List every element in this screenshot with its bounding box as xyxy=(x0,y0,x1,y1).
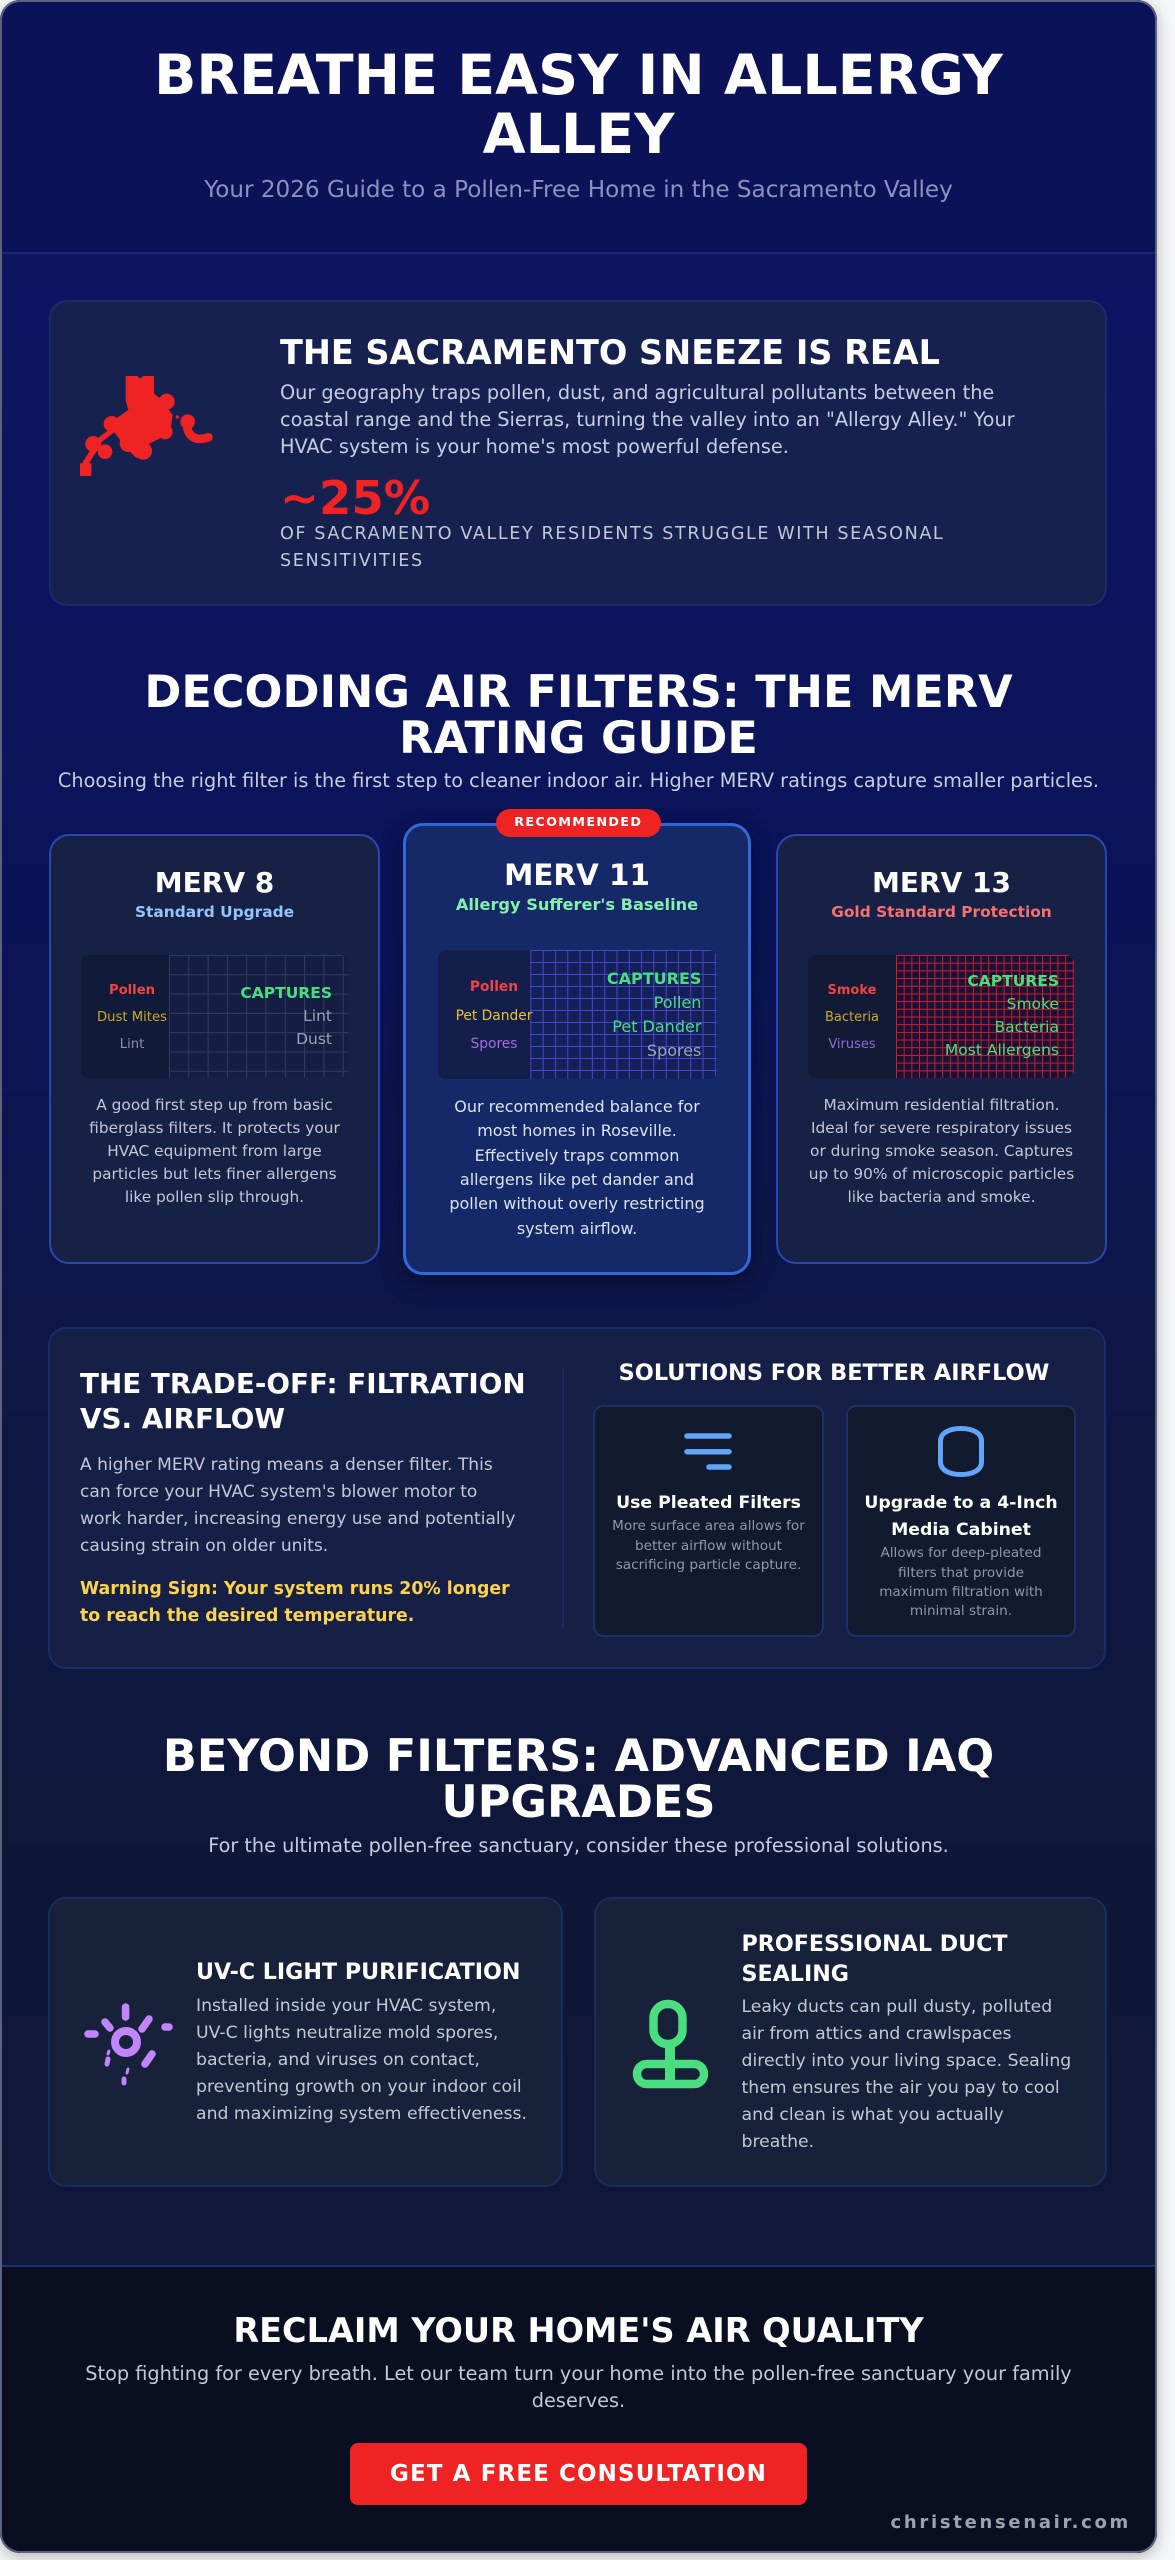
subtitle: Your 2026 Guide to a Pollen-Free Home in the Sacramento Valley xyxy=(204,177,953,203)
solution: media cabinet xyxy=(846,1405,1076,1637)
MERV 11 description xyxy=(449,1097,705,1238)
MERV 11 description: pollen without overly restricting xyxy=(449,1194,705,1213)
pleated text: better airflow without xyxy=(635,1538,782,1554)
particles list: Lint xyxy=(120,1037,144,1052)
panel: UV-C xyxy=(48,1897,563,2187)
title: ALLEY xyxy=(483,102,674,166)
warning text: Warning Sign: Your system runs 20% longer xyxy=(80,1578,510,1598)
MERV 13 tagline: Gold Standard Protection xyxy=(831,903,1052,921)
trade-off body: causing strain on older units. xyxy=(80,1536,328,1556)
cabinet text: filters that provide xyxy=(898,1565,1024,1581)
footer text: deserves. xyxy=(532,2388,625,2412)
pleated text: sacrificing particle capture. xyxy=(616,1557,801,1573)
heading: advanced IAQ: BEYOND FILTERS: ADVANCED IAQ xyxy=(163,1730,994,1782)
stat: ~25% xyxy=(280,471,430,525)
body text: Our geography traps pollen, dust, and agricultural pollutants between the xyxy=(280,381,994,404)
MERV 13 description: like bacteria and smoke. xyxy=(848,1188,1036,1206)
particles list: Viruses xyxy=(828,1037,876,1052)
particles list: Smoke xyxy=(828,983,876,998)
particles list: Dust Mites xyxy=(97,1010,167,1025)
MERV 11 description: system airflow. xyxy=(517,1219,637,1238)
call to action button: GET A FREE CONSULTATION xyxy=(390,2461,767,2487)
body text xyxy=(280,381,1015,458)
panel: duct sealing xyxy=(594,1897,1106,2187)
stat caption xyxy=(280,524,944,570)
captures list: Smoke xyxy=(1007,995,1059,1013)
title: BREATHE EASY IN ALLERGY xyxy=(154,43,1003,108)
particles list: Spores xyxy=(470,1036,518,1052)
panel: Sacramento sneeze xyxy=(49,300,1107,606)
solution: pleated filters xyxy=(593,1405,824,1637)
MERV 13 description xyxy=(809,1096,1074,1206)
panel: MERV 11 recommended xyxy=(403,823,751,1275)
footer xyxy=(0,2265,1157,2553)
MERV 13 description: Ideal for severe respiratory issues xyxy=(811,1118,1072,1136)
captures list: Bacteria xyxy=(995,1018,1059,1036)
MERV 8 description: HVAC equipment from large xyxy=(107,1142,322,1160)
body text: HVAC system is your home's most powerful defense. xyxy=(280,435,789,458)
MERV 13 description: up to 90% of microscopic particles xyxy=(809,1164,1074,1182)
solutions heading: SOLUTIONS FOR BETTER AIRFLOW xyxy=(619,1360,1049,1386)
MERV 8 title: MERV 8 xyxy=(155,866,274,899)
stat caption: OF SACRAMENTO VALLEY RESIDENTS STRUGGLE WITH SEASONAL xyxy=(280,524,944,544)
title xyxy=(154,43,1004,166)
heading: advanced IAQ xyxy=(163,1730,994,1828)
footer text: Stop fighting for every breath. Let our team turn your home into the pollen-free sanctuary your family xyxy=(85,2362,1072,2384)
subheading: MERV guide: Choosing the right filter is the first step to cleaner indoor air. Higher MERV ratings capture smaller particles. xyxy=(58,769,1099,792)
pleated text xyxy=(612,1518,805,1573)
duct text: air from attics and crawlspaces xyxy=(742,2024,1012,2044)
cabinet title: Upgrade to a 4-Inch xyxy=(864,1492,1058,1512)
footer text xyxy=(85,2362,1072,2412)
captures list: Pollen xyxy=(654,993,701,1012)
heading: MERV guide xyxy=(144,666,1013,764)
MERV 13 title: MERV 13 xyxy=(872,866,1011,899)
particles list xyxy=(808,955,896,1078)
captures list: Spores xyxy=(647,1041,701,1060)
panel: MERV 8 xyxy=(49,834,380,1264)
MERV 8 filter diagram xyxy=(81,955,348,1078)
duct text: directly into your living space. Sealing xyxy=(742,2050,1071,2070)
captures list xyxy=(607,969,702,1060)
captures list xyxy=(240,984,332,1048)
heading: MERV guide: DECODING AIR FILTERS: THE MERV xyxy=(144,666,1013,718)
UV-C text: UV-C lights neutralize mold spores, xyxy=(196,2022,498,2042)
icon: filter lines xyxy=(684,1433,732,1470)
trade-off heading: VS. AIRFLOW xyxy=(80,1402,285,1434)
warning text xyxy=(80,1578,510,1626)
trade-off body xyxy=(80,1454,515,1556)
captures list: CAPTURES xyxy=(607,969,701,988)
particles list xyxy=(81,955,169,1078)
recommended badge: RECOMMENDED xyxy=(514,815,642,830)
MERV 11 description: most homes in Roseville. xyxy=(477,1121,677,1140)
MERV 11 title: MERV 11 xyxy=(504,858,650,892)
panel: trade-off xyxy=(48,1327,1106,1669)
cabinet title xyxy=(864,1492,1058,1540)
MERV 8 description: particles but lets finer allergens xyxy=(92,1164,337,1182)
pleated title: Use Pleated Filters xyxy=(616,1492,801,1512)
captures list: CAPTURES xyxy=(240,984,332,1002)
captures list: Lint xyxy=(303,1006,332,1024)
captures list: Pet Dander xyxy=(612,1017,701,1036)
stat caption: SENSITIVITIES xyxy=(280,550,424,570)
call to action button xyxy=(350,2443,807,2505)
duct text: Leaky ducts can pull dusty, polluted xyxy=(742,1996,1052,2016)
warning text: to reach the desired temperature. xyxy=(80,1606,414,1626)
subheading: advanced IAQ: For the ultimate pollen-free sanctuary, consider these professional solutions. xyxy=(208,1834,949,1857)
particles list xyxy=(438,950,530,1079)
trade-off body: work harder, increasing energy use and potentially xyxy=(80,1508,515,1528)
MERV 11 description: Effectively traps common xyxy=(475,1146,679,1165)
trade-off heading xyxy=(80,1367,526,1434)
captures list: Most Allergens xyxy=(945,1041,1059,1059)
duct title xyxy=(742,1931,1008,1987)
cabinet text xyxy=(879,1545,1043,1619)
header xyxy=(0,0,1157,254)
UV-C text: Installed inside your HVAC system, xyxy=(196,1996,496,2016)
trade-off body: can force your HVAC system's blower motor to xyxy=(80,1482,477,1502)
MERV 8 tagline: Standard Upgrade xyxy=(135,903,294,921)
MERV 11 tagline: Allergy Sufferer's Baseline xyxy=(456,895,698,914)
website: christensenair.com xyxy=(891,2512,1131,2533)
body text: coastal range and the Sierras, turning the valley into an "Allergy Alley." Your xyxy=(280,408,1015,431)
icon: UV sun xyxy=(84,2003,173,2086)
duct text xyxy=(742,1996,1071,2152)
footer heading: RECLAIM YOUR HOME'S AIR QUALITY xyxy=(233,2311,924,2350)
MERV 13 filter diagram xyxy=(808,955,1074,1078)
duct text: them ensures the air you pay to cool xyxy=(742,2078,1060,2098)
MERV 13 description: Maximum residential filtration. xyxy=(823,1096,1060,1114)
MERV 8 description: fiberglass filters. It protects your xyxy=(89,1118,340,1136)
cabinet text: Allows for deep-pleated xyxy=(880,1545,1042,1561)
UV-C title: UV-C LIGHT PURIFICATION xyxy=(196,1959,520,1985)
particles list: Pollen xyxy=(109,983,155,998)
duct text: and clean is what you actually xyxy=(742,2104,1004,2124)
trade-off heading: THE TRADE-OFF: FILTRATION xyxy=(80,1367,526,1400)
trade-off body: A higher MERV rating means a denser filter. This xyxy=(80,1454,493,1474)
duct title: SEALING xyxy=(742,1961,849,1987)
cabinet text: maximum filtration with xyxy=(879,1584,1043,1600)
particles list: Pollen xyxy=(470,979,518,995)
MERV 13 description: or during smoke season. Captures xyxy=(810,1142,1073,1160)
MERV 8 description: A good first step up from basic xyxy=(96,1096,333,1114)
captures list: Dust xyxy=(296,1030,332,1048)
particles list: Pet Dander xyxy=(456,1008,532,1024)
cabinet title: Media Cabinet xyxy=(891,1520,1031,1540)
duct title: PROFESSIONAL DUCT xyxy=(742,1931,1008,1957)
pleated text: More surface area allows for xyxy=(612,1518,805,1534)
captures list xyxy=(945,972,1059,1059)
particles list: Bacteria xyxy=(825,1010,879,1025)
MERV 11 description: allergens like pet dander and xyxy=(460,1170,694,1189)
icon: duct xyxy=(632,2000,708,2088)
MERV 8 description xyxy=(89,1096,340,1206)
UV-C text: preventing growth on your indoor coil xyxy=(196,2076,522,2096)
duct text: breathe. xyxy=(742,2132,814,2152)
UV-C text: bacteria, and viruses on contact, xyxy=(196,2050,480,2070)
cabinet text: minimal strain. xyxy=(910,1603,1012,1619)
captures list: CAPTURES xyxy=(967,972,1059,990)
icon: red pollen splat map xyxy=(80,376,213,476)
MERV 8 description: like pollen slip through. xyxy=(125,1188,304,1206)
heading: THE SACRAMENTO SNEEZE IS REAL xyxy=(280,333,940,372)
UV-C text: and maximizing system effectiveness. xyxy=(196,2104,527,2124)
recommended badge xyxy=(496,809,661,837)
UV-C text xyxy=(196,1996,527,2124)
icon: cabinet xyxy=(938,1426,984,1477)
MERV 11 filter diagram xyxy=(438,950,717,1079)
heading: MERV guide: RATING GUIDE xyxy=(399,712,758,764)
MERV 11 description: Our recommended balance for xyxy=(454,1097,700,1116)
heading: advanced IAQ: UPGRADES xyxy=(442,1776,715,1828)
panel: MERV 13 xyxy=(776,834,1107,1264)
